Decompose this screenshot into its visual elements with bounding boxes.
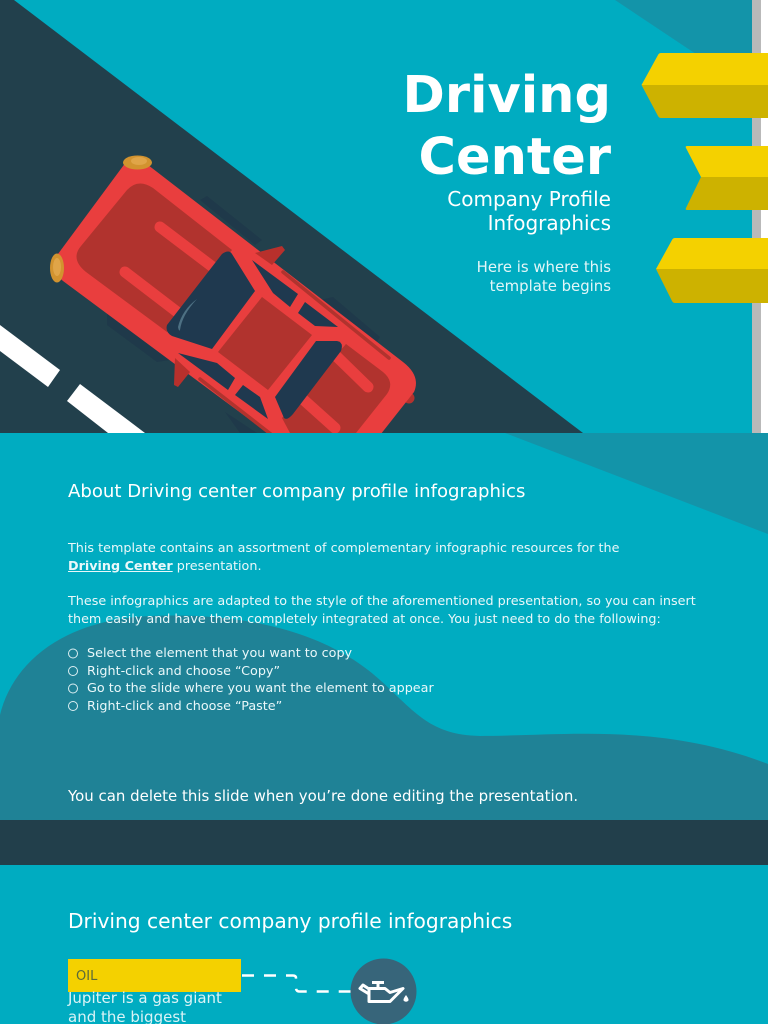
instruction list: Right-click and choose “Paste” — [87, 698, 282, 714]
yellow sign 1 — [642, 53, 768, 118]
instruction list: Go to the slide where you want the element to appear — [87, 681, 434, 696]
oil description — [67, 989, 222, 1024]
section heading: Driving center company profile infographics — [68, 909, 512, 933]
oil label bar — [68, 959, 241, 992]
intro paragraph — [68, 541, 619, 574]
hero background — [0, 0, 761, 433]
adaptation paragraph — [68, 594, 696, 626]
instruction list: Right-click and choose “Copy” — [87, 664, 280, 678]
hero description: template begins — [490, 276, 611, 294]
subtitle: Infographics — [488, 211, 611, 235]
hero description: Here is where this — [477, 258, 611, 276]
oil description: Jupiter is a gas giant — [68, 989, 222, 1007]
bullet list markers — [68, 649, 78, 710]
main title: Driving — [402, 66, 611, 125]
headlights — [50, 156, 152, 282]
side windows — [178, 260, 338, 419]
intro paragraph: Driving Center presentation. — [68, 558, 262, 574]
wave shape — [0, 615, 768, 820]
intro paragraph: This template contains an assortment of complementary infographic resources for the — [68, 541, 619, 556]
windshield — [167, 252, 255, 349]
mirrors — [174, 246, 285, 387]
dashed connector — [242, 976, 351, 992]
windshield glare — [178, 299, 197, 331]
road lane markings — [0, 325, 145, 433]
yellow sign 2 — [686, 146, 768, 210]
yellow sign 3 — [656, 238, 768, 303]
subtitle — [447, 187, 611, 235]
dark band — [0, 820, 768, 865]
about section background — [0, 433, 768, 820]
top right shade — [505, 433, 768, 534]
oil label: OIL — [76, 969, 97, 984]
rear light — [406, 394, 414, 404]
sign pole — [752, 0, 761, 433]
rear window — [275, 341, 342, 419]
icon: oil can — [360, 982, 409, 1002]
rear deck — [282, 344, 390, 433]
car — [50, 156, 416, 458]
main title: Center — [419, 128, 611, 187]
side trim — [200, 272, 389, 435]
darker teal corner shape — [615, 0, 752, 60]
subtitle: Company Profile — [447, 187, 611, 211]
hood and deck stripes — [125, 227, 368, 428]
about heading: About Driving center company profile infographics — [68, 481, 525, 502]
car body — [58, 164, 416, 433]
closing note: You can delete this slide when you’re done editing the presentation. — [68, 787, 578, 805]
roof — [218, 297, 312, 390]
instruction list — [87, 646, 434, 714]
main title — [402, 66, 611, 187]
instruction list: Select the element that you want to copy — [87, 646, 352, 661]
hood — [77, 183, 232, 332]
lower section background — [0, 865, 768, 1024]
adaptation paragraph: These infographics are adapted to the style of the aforementioned presentation, so you can insert — [68, 594, 696, 609]
road — [0, 0, 583, 433]
hero description — [477, 258, 611, 294]
car shadow — [107, 196, 380, 433]
adaptation paragraph: them easily and have them completely integrated at once. You just need to do the following: — [68, 612, 661, 626]
oil icon circle — [350, 958, 416, 1024]
